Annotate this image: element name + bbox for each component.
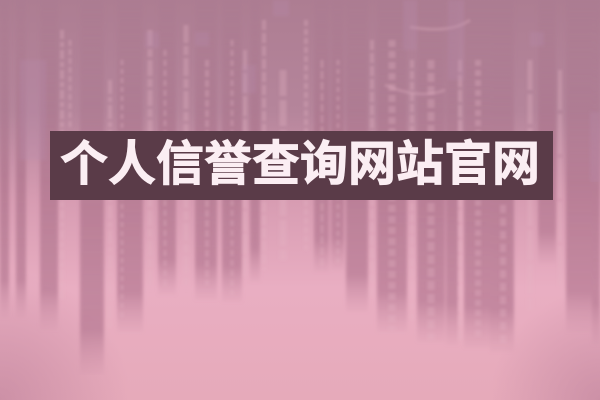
title banner bbox=[50, 131, 553, 200]
title text: 个人信誉查询网站官网 bbox=[60, 138, 540, 191]
